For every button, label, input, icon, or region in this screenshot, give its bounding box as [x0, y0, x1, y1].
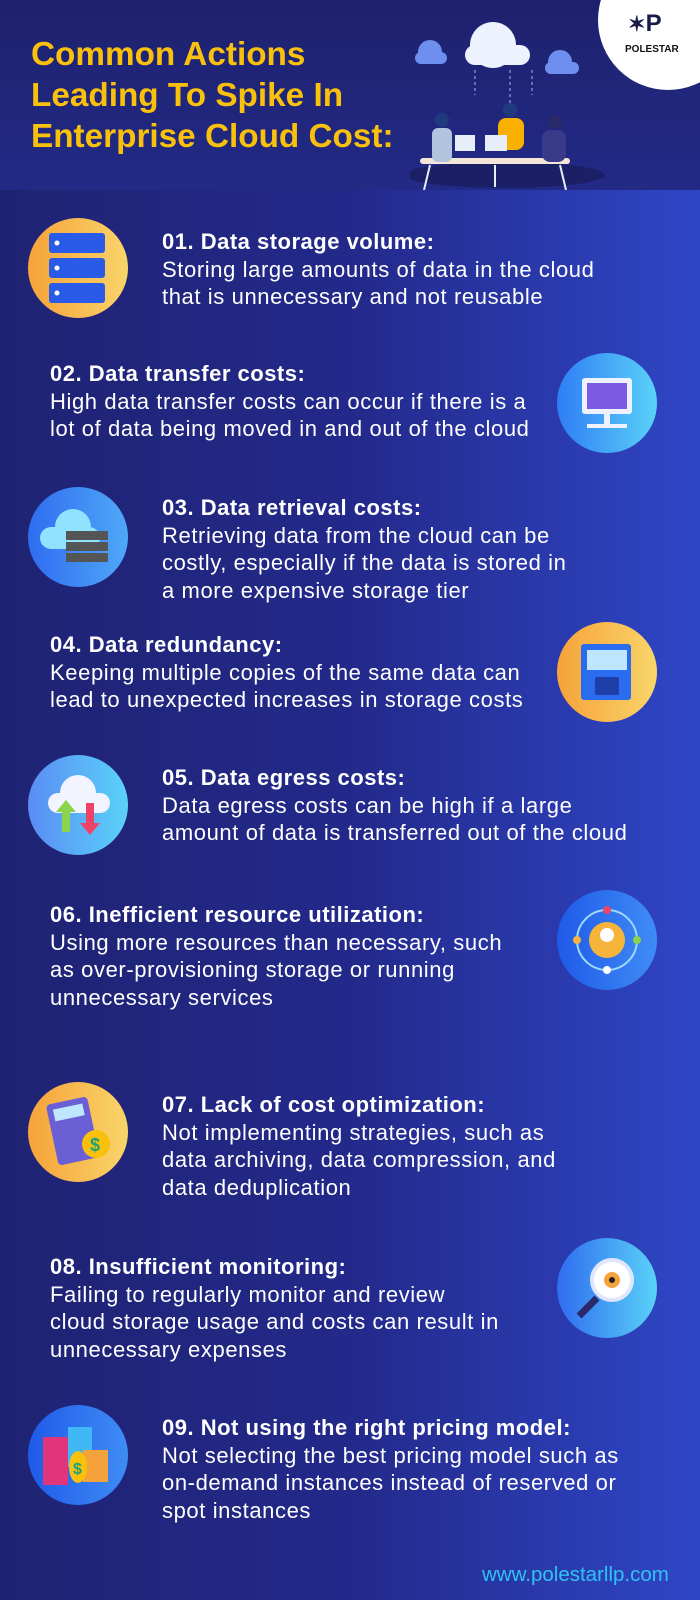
text: 08: Failing to regularly monitor and review [50, 1282, 445, 1306]
text: 08: 08. Insufficient monitoring: [50, 1254, 346, 1279]
text: 02: lot of data being moved in and out of the cloud [50, 416, 530, 441]
item 03 [28, 487, 566, 602]
item 07 [28, 1082, 556, 1200]
text: 04: lead to unexpected increases in storage costs [50, 687, 523, 712]
text: 03: costly, especially if the data is stored in [162, 550, 566, 575]
item 02 [50, 353, 657, 453]
text: 05: 05. Data egress costs: [162, 765, 405, 790]
text: 02: 02. Data transfer costs: [50, 361, 305, 386]
text: 08 [50, 1254, 499, 1362]
icon: monitor transfer [557, 353, 657, 453]
logo badge [598, 0, 700, 90]
icon: calculator: $ [90, 1135, 100, 1155]
text: 03: a more expensive storage tier [162, 578, 469, 602]
text: 09: on-demand instances instead of reserved or [162, 1470, 616, 1495]
text: 08: unnecessary expenses [50, 1336, 287, 1362]
text: 08: cloud storage usage and costs can result in [50, 1309, 499, 1334]
text: 06: unnecessary services [50, 984, 274, 1010]
text: 02: High data transfer costs can occur if there is a [50, 388, 526, 414]
icon: magnifier eye [557, 1238, 657, 1338]
icon: server stack [28, 218, 128, 318]
title: Leading To Spike In [31, 77, 343, 114]
text: 09: Not selecting the best pricing model such as [162, 1442, 619, 1468]
text: 01 [162, 229, 594, 309]
text: 07 [162, 1092, 556, 1200]
text: 07: 07. Lack of cost optimization: [162, 1092, 485, 1117]
text: 09: spot instances [162, 1498, 311, 1522]
text: 06: Using more resources than necessary, such [50, 930, 502, 954]
logo badge: ✶P [628, 10, 662, 37]
icon: calculator [28, 1082, 128, 1182]
header band [0, 0, 700, 190]
text: 03: 03. Data retrieval costs: [162, 495, 422, 520]
text: 09 [162, 1415, 619, 1522]
item 09 [28, 1405, 619, 1522]
icon: pricing blocks: $ [73, 1461, 82, 1478]
text: 04: Keeping multiple copies of the same data can [50, 660, 520, 684]
title: Common Actions [31, 36, 305, 73]
logo badge: POLESTAR [625, 44, 679, 55]
icon: user network [557, 890, 657, 990]
text: 05 [162, 765, 627, 845]
text: 04: 04. Data redundancy: [50, 632, 283, 657]
text: 01: that is unnecessary and not reusable [162, 284, 543, 309]
item 04 [50, 622, 657, 722]
item 08 [50, 1238, 657, 1362]
text: 07: Not implementing strategies, such as [162, 1120, 544, 1144]
footer url: www.polestarllp.com [482, 1563, 669, 1586]
text: 06: as over-provisioning storage or running [50, 957, 455, 982]
text: 03 [162, 495, 566, 602]
icon: pricing blocks [28, 1405, 128, 1505]
text: 02 [50, 361, 530, 441]
title: Enterprise Cloud Cost: [31, 118, 394, 155]
icon: cloud servers [28, 487, 128, 587]
text: 01: 01. Data storage volume: [162, 229, 434, 254]
text: 07: data archiving, data compression, and [162, 1147, 556, 1172]
text: 06: 06. Inefficient resource utilization: [50, 902, 424, 927]
illustration: team at table with clouds [410, 22, 605, 190]
text: 06 [50, 902, 502, 1010]
item 06 [50, 890, 657, 1010]
text: 09: 09. Not using the right pricing model: [162, 1415, 571, 1440]
text: 05: Data egress costs can be high if a large [162, 792, 572, 818]
text: 04 [50, 632, 523, 712]
item 05 [28, 755, 627, 855]
title [31, 36, 394, 155]
text: 03: Retrieving data from the cloud can be [162, 522, 550, 548]
icon: cloud up/down [28, 755, 128, 855]
icon: secure folder [557, 622, 657, 722]
item 01 [28, 218, 594, 318]
text: 05: amount of data is transferred out of the cloud [162, 820, 627, 845]
text: 07: data deduplication [162, 1174, 351, 1200]
text: 01: Storing large amounts of data in the cloud [162, 256, 594, 282]
